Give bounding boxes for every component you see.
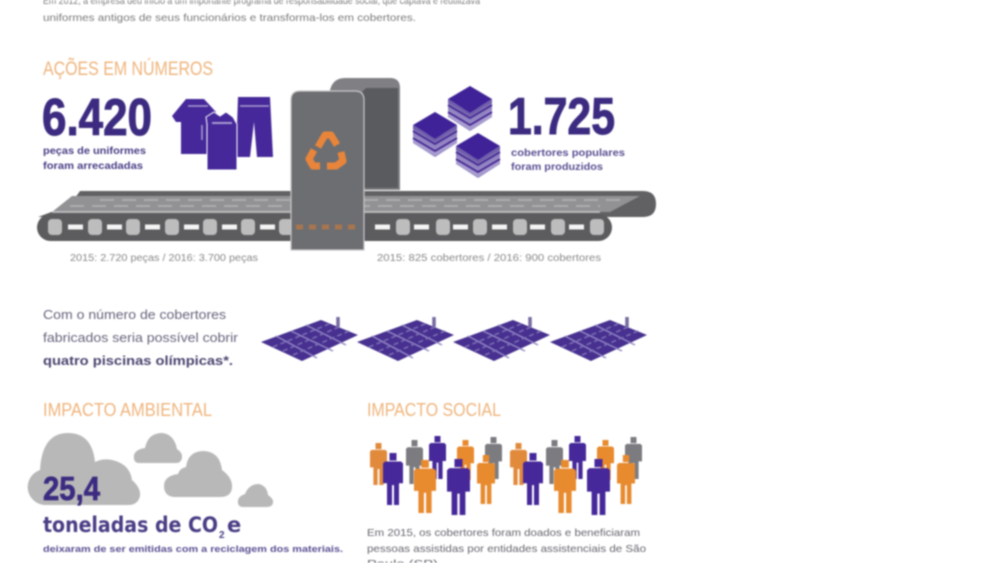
captions: yearly figures xyxy=(70,253,601,264)
machine front xyxy=(291,91,364,250)
stat: uniforms: 6.420 xyxy=(42,89,152,147)
stat: co2: toneladas de CO xyxy=(43,513,218,537)
icon: uniforms xyxy=(172,97,273,170)
stat: uniforms: foram arrecadadas xyxy=(43,161,143,172)
icon: recycle xyxy=(309,135,343,166)
icon: four olympic pools xyxy=(261,317,647,361)
icon: clouds xyxy=(28,433,273,507)
text: olympic pools comparison: Com o número de cobertores xyxy=(43,307,227,322)
intro text xyxy=(43,0,480,24)
heading: ações em números: AÇÕES EM NÚMEROS xyxy=(43,58,213,80)
text: social impact xyxy=(367,527,646,563)
intro text: uniformes antigos de seus funcionários e transforma-los em cobertores. xyxy=(43,12,416,24)
captions: yearly figures: 2015: 2.720 peças / 2016: 3.700 peças xyxy=(70,253,258,264)
stat: blankets xyxy=(508,88,625,173)
machine back xyxy=(330,78,400,190)
text: olympic pools comparison xyxy=(43,307,239,368)
text: olympic pools comparison: quatro piscinas olímpicas*. xyxy=(43,353,233,368)
stat: co2: 2 xyxy=(219,530,225,541)
stat: blankets: 1.725 xyxy=(508,88,615,146)
icon: people xyxy=(370,436,642,515)
conveyor belt xyxy=(37,191,656,241)
text: social impact: pessoas assistidas por entidades assistenciais de São xyxy=(367,543,646,555)
text: social impact: Em 2015, os cobertores foram doados e beneficiaram xyxy=(367,527,640,539)
stat: co2: e xyxy=(227,513,241,537)
icon: folded blankets xyxy=(413,86,500,178)
stat: co2: deixaram de ser emitidas com a reciclagem dos materiais. xyxy=(43,544,343,554)
text: olympic pools comparison: fabricados seria possível cobrir xyxy=(43,330,239,345)
stat: uniforms: peças de uniformes xyxy=(43,146,146,157)
stat: blankets: cobertores populares xyxy=(511,148,625,159)
stat: co2: 25,4 xyxy=(43,470,101,507)
stat: blankets: foram produzidos xyxy=(511,162,603,173)
heading: impacto ambiental: IMPACTO AMBIENTAL xyxy=(43,400,212,420)
heading: impacto social: IMPACTO SOCIAL xyxy=(367,400,501,420)
stat: uniforms xyxy=(42,89,152,172)
captions: yearly figures: 2015: 825 cobertores / 2016: 900 cobertores xyxy=(377,253,601,264)
stat: co2 xyxy=(43,470,343,554)
